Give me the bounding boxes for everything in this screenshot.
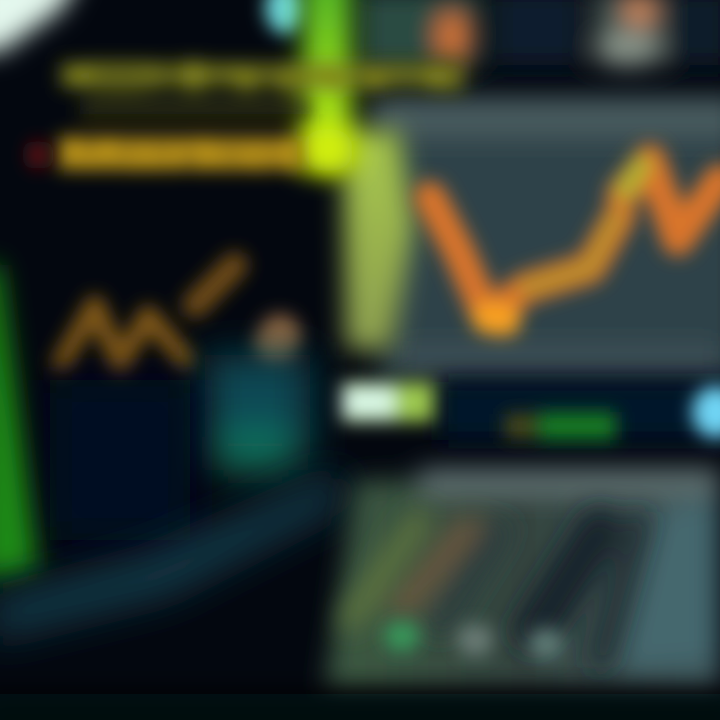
red spot left of title xyxy=(28,141,48,169)
icon: white corner glow xyxy=(0,0,82,52)
status strip xyxy=(440,382,720,440)
green vertical beam xyxy=(302,0,352,170)
pale green pill xyxy=(342,382,434,422)
green status text xyxy=(505,412,616,440)
icon: cyan glow at top xyxy=(265,0,305,34)
chart area: grey-teal panel xyxy=(370,95,720,380)
line chart: orange price line xyxy=(430,160,720,320)
glow column under the beam xyxy=(342,130,414,350)
dark blue block xyxy=(50,380,190,540)
title: Market xyxy=(58,131,304,180)
title: Chart xyxy=(60,55,465,99)
green left bar xyxy=(0,265,38,580)
cyan blob right xyxy=(692,386,720,438)
small chart: left orange peaks xyxy=(62,265,280,365)
lower panel spots xyxy=(384,621,564,660)
lower panel xyxy=(325,468,720,690)
lime hot spot xyxy=(302,128,354,172)
bottom dark band xyxy=(0,694,720,720)
teal block xyxy=(205,355,310,470)
diagonal teal strip xyxy=(0,472,345,640)
title xyxy=(58,55,465,180)
top right header: thumbnails xyxy=(360,0,720,68)
lower panel dark streaks xyxy=(350,520,640,660)
